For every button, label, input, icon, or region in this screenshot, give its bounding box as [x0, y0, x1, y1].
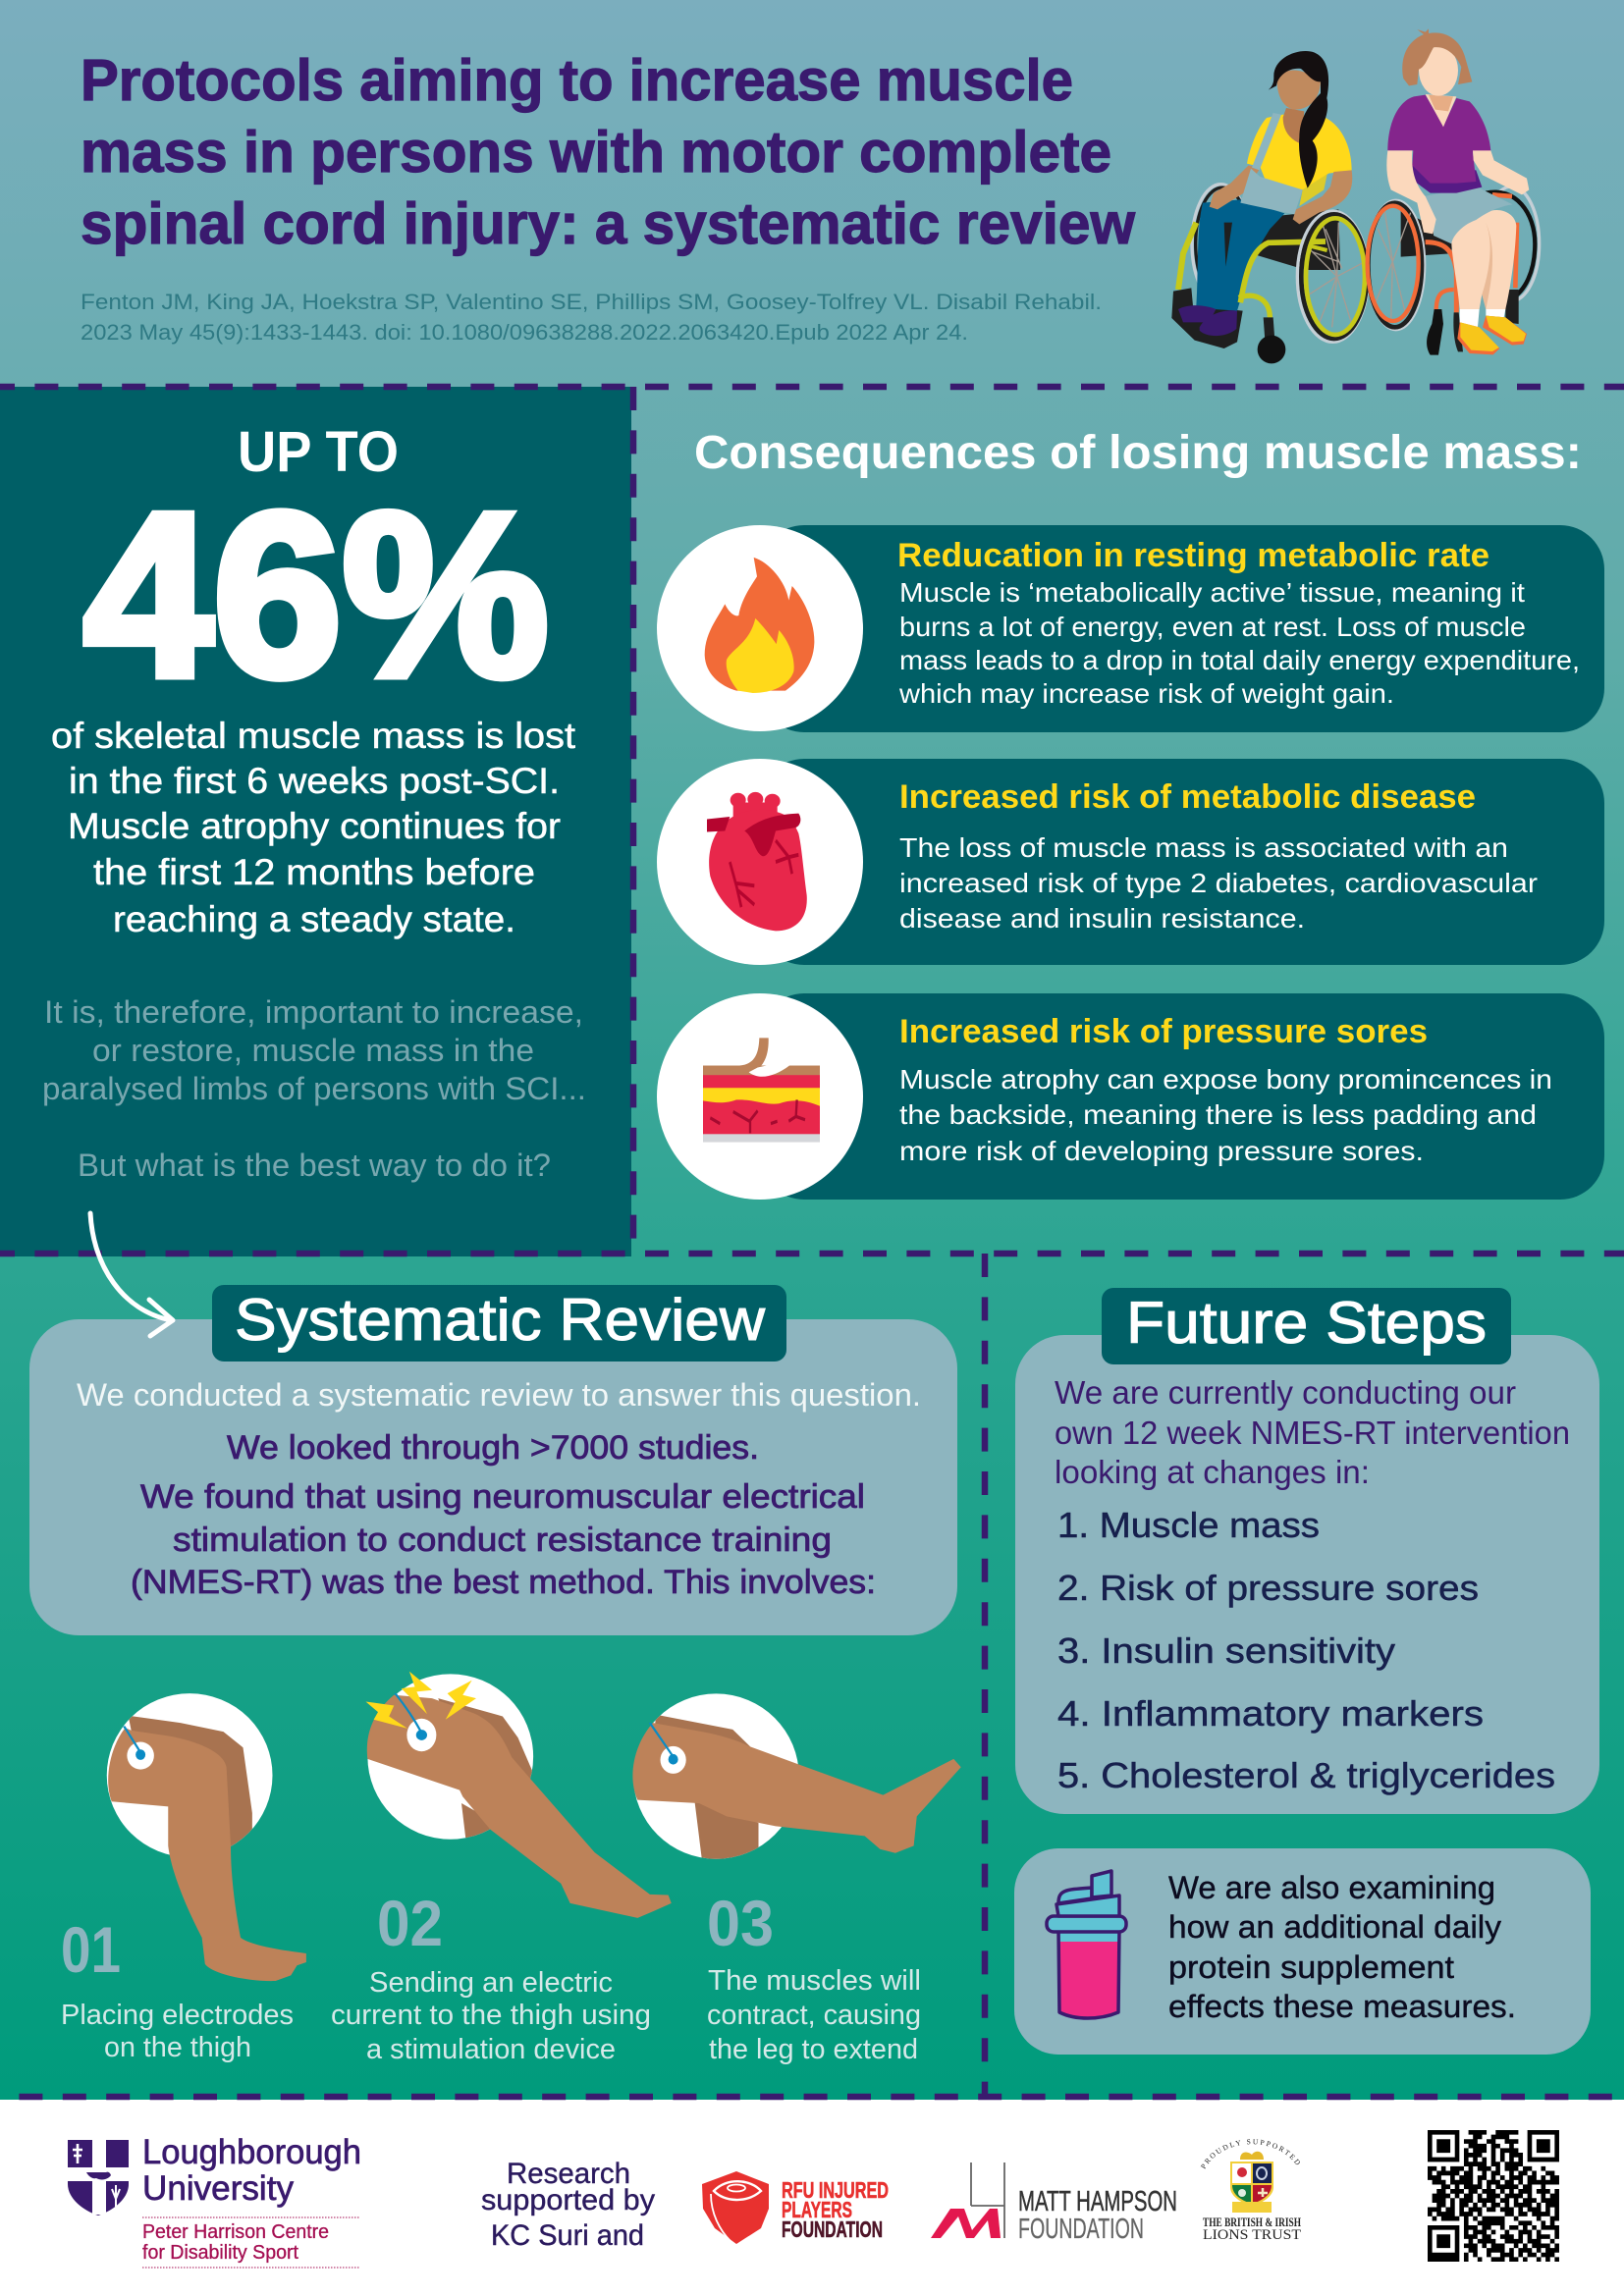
card: resting metabolic rate: Muscle is ‘metabolically active’ tissue, meaning it — [899, 577, 1525, 608]
icon: shaker bottle — [1047, 1871, 1126, 2018]
illustration: leg with electrode — [107, 1693, 306, 1981]
panel: consequences of losing muscle mass — [657, 427, 1604, 1200]
QR code — [1428, 2132, 1559, 2260]
text: why increase muscle mass: But what is the best way to do it? — [78, 1148, 551, 1183]
logo: Matt Hampson Foundation: MATT HAMPSON — [1018, 2186, 1177, 2217]
person 1 in wheelchair — [1171, 51, 1368, 363]
logo: RFU Injured Players Foundation: FOUNDATION — [782, 2216, 883, 2242]
caption: on the thigh — [104, 2032, 251, 2063]
caption: The muscles will — [708, 1965, 921, 1997]
caption: a stimulation device — [366, 2034, 616, 2065]
text: why increase muscle mass: or restore, muscle mass in the — [92, 1033, 534, 1068]
caption: Sending an electric — [369, 1967, 613, 1999]
illustration: leg with current — [365, 1672, 672, 1918]
title: mass in persons with motor complete — [81, 120, 1111, 185]
icon: lightning bolts — [365, 1672, 476, 1729]
card: resting metabolic rate: mass leads to a drop in total daily energy expenditure, — [899, 645, 1580, 675]
caption: the leg to extend — [709, 2034, 918, 2065]
header: title and citation — [81, 48, 1135, 345]
title: Protocols aiming to increase muscle — [81, 48, 1073, 113]
list: outcome measures: 5. Cholesterol & triglycerides — [1057, 1755, 1555, 1795]
text: protein supplement: We are also examining — [1168, 1870, 1495, 1905]
card: resting metabolic rate: which may increase risk of weight gain. — [898, 678, 1394, 709]
card: pressure sores: more risk of developing pressure sores. — [899, 1136, 1424, 1166]
caption — [61, 2000, 294, 2063]
card: resting metabolic rate: Reducation in resting metabolic rate — [897, 537, 1489, 574]
text: review summary: We found that using neuromuscular electrical — [140, 1478, 865, 1516]
text: why increase muscle mass: It is, therefore, important to increase, — [44, 994, 583, 1030]
text: review summary: stimulation to conduct resistance training — [173, 1522, 832, 1559]
text: protein supplement: protein supplement — [1168, 1949, 1454, 1985]
list: outcome measures: 3. Insulin sensitivity — [1057, 1630, 1395, 1671]
card: metabolic disease: Increased risk of metabolic disease — [899, 778, 1476, 816]
text: muscle loss statement: of skeletal muscle mass is lost — [51, 716, 576, 756]
text: research supported by: KC Suri and — [491, 2219, 644, 2252]
text: protein supplement: effects these measures. — [1168, 1989, 1516, 2024]
logo: RFU Injured Players Foundation — [702, 2171, 889, 2244]
caption: contract, causing — [707, 2000, 921, 2031]
diagram: NMES-RT three steps — [61, 1672, 961, 2065]
heading: future steps: Future Steps — [1126, 1290, 1487, 1356]
logo: Loughborough University: University — [142, 2169, 294, 2208]
step 3: muscles contract — [632, 1693, 961, 2065]
illustration: extended leg — [632, 1693, 961, 1860]
title: spinal cord injury: a systematic review — [81, 191, 1135, 256]
title — [81, 48, 1135, 256]
card: pressure sores: Muscle atrophy can expose bony promincences in — [899, 1064, 1552, 1095]
panel: future steps — [1015, 1288, 1599, 1814]
list: outcome measures: 2. Risk of pressure sores — [1057, 1568, 1479, 1608]
list: outcome measures: 1. Muscle mass — [1057, 1505, 1320, 1545]
card: metabolic disease — [657, 759, 1604, 965]
caption — [331, 1967, 651, 2065]
text: current intervention: looking at changes in: — [1055, 1454, 1370, 1490]
citation — [81, 290, 1102, 345]
text: research supported by: supported by — [481, 2184, 655, 2216]
text: current intervention — [1055, 1374, 1570, 1490]
card: pressure sores: the backside, meaning there is less padding and — [899, 1099, 1537, 1130]
logo: Loughborough University: for Disability Sport — [142, 2242, 298, 2264]
person 2 in wheelchair — [1367, 28, 1540, 355]
logo: British and Irish Lions Trust — [1200, 2139, 1301, 2243]
number 03: 03 — [707, 1887, 774, 1959]
text: why increase muscle mass: paralysed limbs of persons with SCI... — [42, 1071, 586, 1106]
icon: heart — [707, 792, 807, 931]
icon: university shield — [68, 2140, 129, 2216]
card: metabolic disease: increased risk of type 2 diabetes, cardiovascular — [899, 868, 1538, 898]
text: muscle loss statement: Muscle atrophy continues for — [68, 806, 561, 846]
text: review summary: We looked through >7000 studies. — [227, 1429, 759, 1467]
panel: protein supplement — [1014, 1848, 1591, 2055]
icon: flame — [705, 558, 814, 693]
logo: British and Irish Lions Trust: THE BRITISH & IRISH — [1203, 2216, 1301, 2229]
panel: key statistic text — [42, 420, 586, 1183]
text: muscle loss statement — [51, 716, 576, 939]
logo: British and Irish Lions Trust: PROUDLY SUPPORTED BY — [1200, 2139, 1300, 2169]
number 01: 01 — [61, 1913, 121, 1986]
caption — [707, 1965, 921, 2065]
arrow: from question to systematic review — [90, 1213, 173, 1336]
text: muscle loss statement: in the first 6 weeks post-SCI. — [69, 761, 560, 801]
text: review summary: We conducted a systematic review to answer this question. — [77, 1377, 921, 1413]
card: resting metabolic rate: burns a lot of energy, even at rest. Loss of muscle — [899, 612, 1526, 642]
citation: Fenton JM, King JA, Hoekstra SP, Valentino SE, Phillips SM, Goosey-Tolfrey VL. Disabil Rehabil. — [81, 290, 1102, 314]
step 1: placing electrodes — [61, 1693, 306, 2063]
logo: Matt Hampson Foundation — [931, 2163, 1177, 2245]
number 02: 02 — [377, 1887, 443, 1959]
text: current intervention: own 12 week NMES-RT intervention — [1055, 1415, 1570, 1451]
panel: systematic review — [29, 1285, 957, 1635]
card: metabolic disease: disease and insulin resistance. — [899, 903, 1305, 934]
citation: 2023 May 45(9):1433-1443. doi: 10.1080/09638288.2022.2063420.Epub 2022 Apr 24. — [81, 320, 968, 345]
list: outcome measures: 4. Inflammatory markers — [1057, 1693, 1484, 1734]
text: research supported by: Research — [507, 2158, 630, 2190]
text: muscle loss statement: reaching a steady state. — [113, 899, 515, 939]
logo: RFU Injured Players Foundation: RFU INJURED — [782, 2177, 889, 2203]
panel: left statistic background — [0, 387, 631, 1256]
text: protein supplement — [1168, 1870, 1516, 2024]
icon: skin layers — [703, 1038, 820, 1143]
logo: British and Irish Lions Trust: LIONS TRUST — [1203, 2227, 1301, 2243]
heading: systematic review: Systematic Review — [235, 1287, 766, 1353]
caption: current to the thigh using — [331, 2000, 651, 2031]
list: outcome measures — [1057, 1505, 1555, 1795]
text: review summary — [77, 1377, 921, 1601]
text: muscle loss statement: the first 12 months before — [93, 852, 535, 892]
heading: consequences: Consequences of losing muscle mass: — [694, 427, 1582, 479]
logo: Loughborough University: Peter Harrison Centre — [142, 2221, 329, 2243]
step 2: electric current — [331, 1672, 672, 2065]
illustration: two wheelchair users — [1171, 28, 1540, 363]
caption: Placing electrodes — [61, 2000, 294, 2031]
card: pressure sores — [657, 993, 1604, 1200]
text: research supported by — [481, 2158, 655, 2252]
logo: Loughborough University: Loughborough — [142, 2133, 361, 2171]
card: metabolic disease: The loss of muscle mass is associated with an — [899, 832, 1508, 863]
card: pressure sores: Increased risk of pressure sores — [899, 1013, 1428, 1050]
text: review summary: (NMES-RT) was the best method. This involves: — [131, 1564, 876, 1601]
text: why increase muscle mass — [42, 994, 586, 1183]
card: resting metabolic rate — [657, 525, 1604, 732]
logo: Matt Hampson Foundation: FOUNDATION — [1018, 2214, 1144, 2245]
big number: 46 percent: 46% — [83, 465, 549, 725]
heading: up to: UP TO — [238, 420, 399, 484]
text: current intervention: We are currently conducting our — [1055, 1374, 1516, 1411]
text: protein supplement: how an additional daily — [1168, 1909, 1501, 1945]
logo: RFU Injured Players Foundation: PLAYERS — [782, 2197, 852, 2222]
logo: Loughborough University — [68, 2133, 361, 2268]
